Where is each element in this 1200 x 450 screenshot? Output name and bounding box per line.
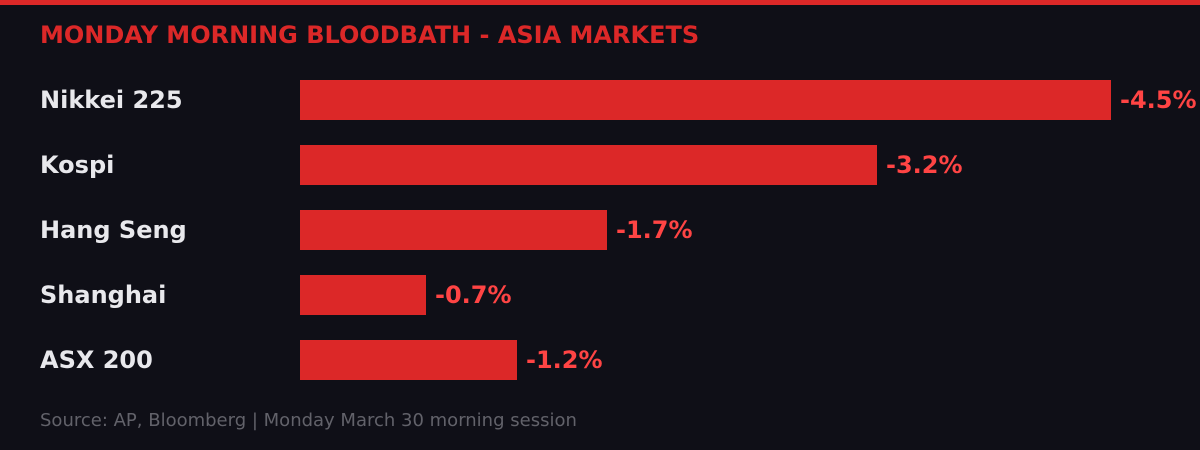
row: ASX 200: -1.2% <box>526 346 603 374</box>
row: Kospi: Kospi <box>40 151 114 179</box>
row: Kospi: -3.2% <box>886 151 963 179</box>
row: Nikkei 225: Nikkei 225 <box>40 86 183 114</box>
row: Nikkei 225: -4.5% <box>1120 86 1197 114</box>
row: Hang Seng: -1.7% <box>616 216 693 244</box>
row: Shanghai: Shanghai <box>40 281 166 309</box>
title: MONDAY MORNING BLOODBATH - ASIA MARKETS <box>40 21 699 49</box>
source note: Source: AP, Bloomberg | Monday March 30 morning session <box>40 410 577 431</box>
top accent bar <box>0 0 1200 5</box>
row: Shanghai <box>40 275 512 315</box>
row: ASX 200: ASX 200 <box>40 346 153 374</box>
row: Hang Seng <box>40 210 693 250</box>
row: Shanghai: -0.7% <box>435 281 512 309</box>
row: Hang Seng: Hang Seng <box>40 216 187 244</box>
row: Kospi <box>40 145 963 185</box>
row: ASX 200 <box>40 340 603 380</box>
row: Nikkei 225 <box>40 80 1197 120</box>
